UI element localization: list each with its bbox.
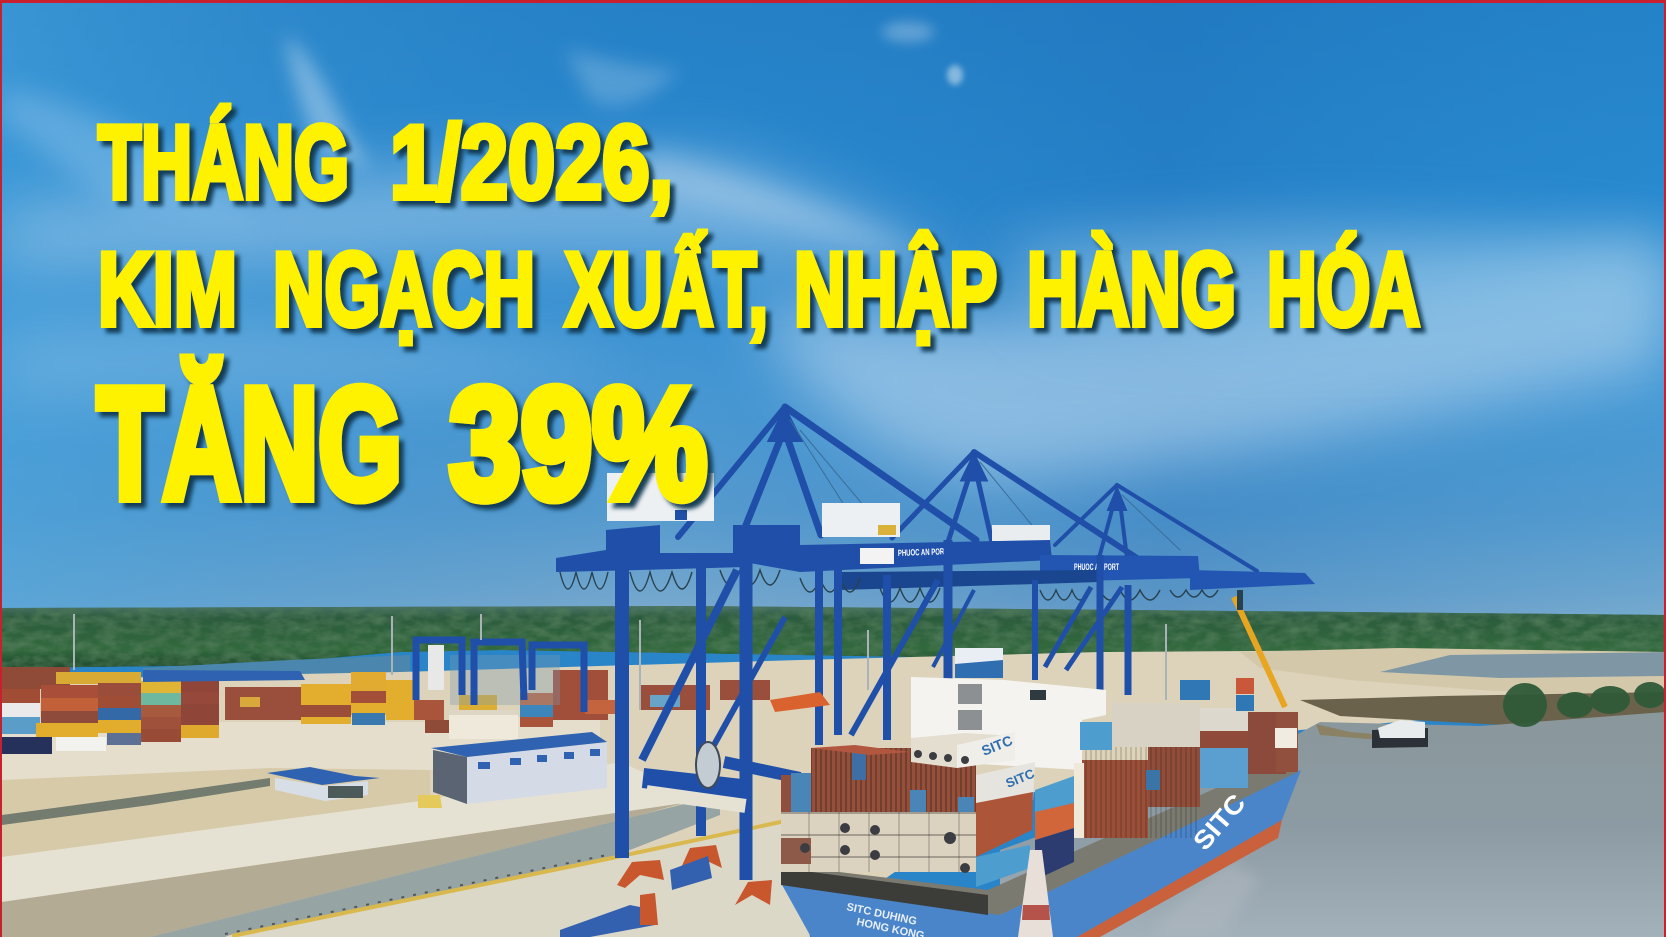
crane stays and apex frames <box>678 407 1257 571</box>
headline line 1 <box>98 105 673 221</box>
main river <box>1000 712 1666 937</box>
container ship <box>781 648 1301 937</box>
headline line 3: 39% <box>449 356 707 532</box>
forest treeline <box>0 606 1666 668</box>
canal and embankment <box>2 795 810 937</box>
sky background <box>0 0 1666 640</box>
container yard <box>2 655 770 754</box>
side column two <box>1035 776 1074 812</box>
ship hull <box>781 770 1301 937</box>
white machine houses <box>607 473 1050 541</box>
hull lettering: SITC <box>1187 788 1252 856</box>
white forward mast <box>1018 850 1053 937</box>
clouds <box>0 22 1666 480</box>
light poles <box>74 614 1166 710</box>
blue roof building behind yard <box>143 670 305 682</box>
warehouse <box>418 732 607 808</box>
forward container stacks <box>1082 760 1148 838</box>
crane girders: PHUOC AN PORT <box>1074 562 1119 572</box>
container ship: SITC <box>979 732 1015 759</box>
crane girders: PHUOC AN PORT <box>898 546 948 558</box>
mangrove island <box>1503 682 1666 727</box>
tug and barge <box>1316 720 1428 748</box>
crane legs <box>622 530 1128 880</box>
headline line 2: KIM <box>98 232 237 348</box>
office building <box>449 710 518 739</box>
ship name: SITC DUHING <box>845 901 918 928</box>
headline line 2: HÓA <box>1267 232 1420 348</box>
headline line 2: HÀNG <box>1027 232 1236 348</box>
headline line 3: TĂNG <box>97 356 402 532</box>
headline line 2: XUẤT, <box>565 232 768 348</box>
container ship: SITC <box>1004 766 1037 791</box>
headline line 1: THÁNG <box>98 105 349 221</box>
back river <box>143 655 410 682</box>
superstructure <box>911 677 1106 770</box>
crane girders <box>556 525 1315 590</box>
rubber-tyred gantry cranes <box>416 640 584 712</box>
headline line 1: 1/2026, <box>390 105 673 221</box>
headline <box>97 105 1420 532</box>
headline line 2: NHẬP <box>794 232 997 348</box>
upper reefer containers <box>911 733 1015 768</box>
deck base <box>781 755 1298 915</box>
crane equipment <box>560 590 1285 937</box>
port ground <box>0 648 1666 937</box>
side column one <box>976 762 1035 803</box>
hull boot stripe <box>1077 820 1282 937</box>
small guard house <box>267 767 380 801</box>
quay cranes <box>556 407 1315 937</box>
headline line 2 <box>98 232 1420 348</box>
headline line 2: NGẠCH <box>273 232 535 348</box>
crane cables <box>560 570 1218 602</box>
aft container stacks <box>811 748 976 820</box>
